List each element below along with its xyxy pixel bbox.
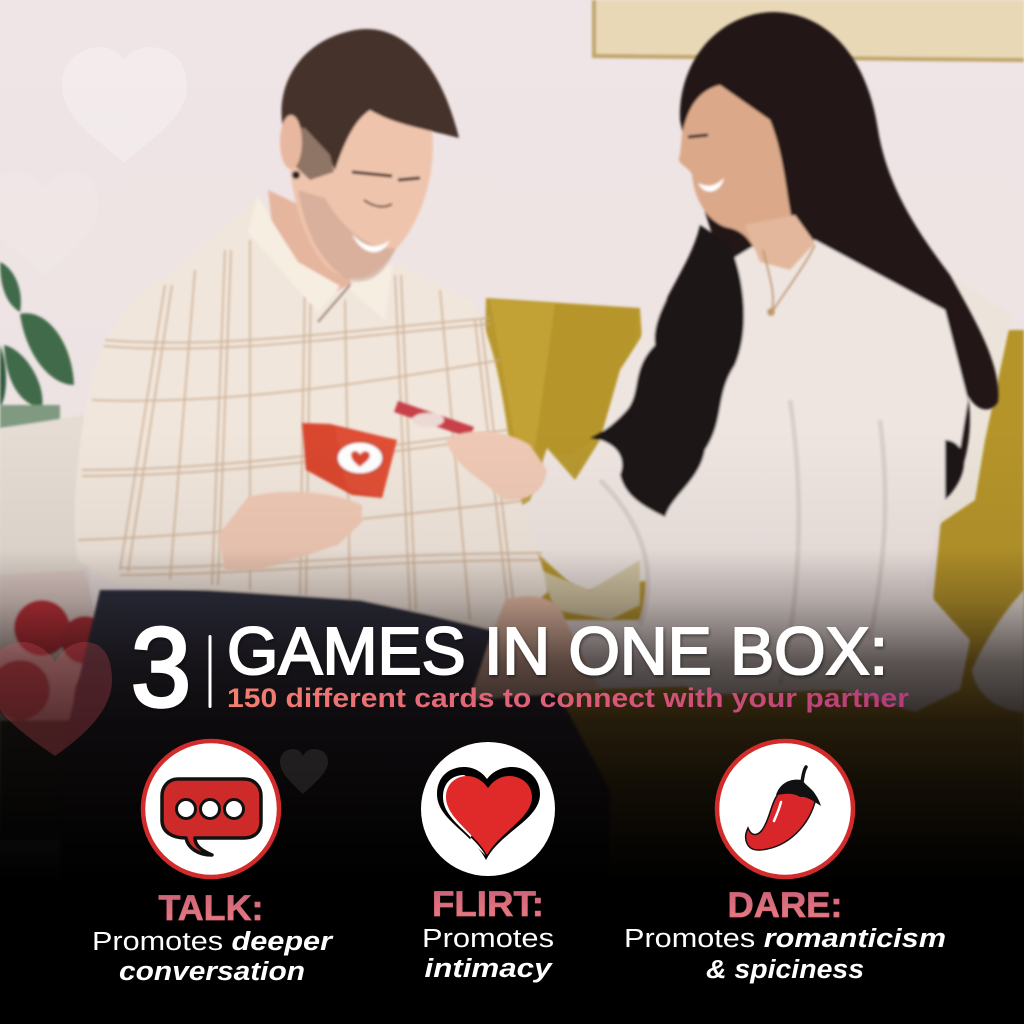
description: dare line 2: & spiciness xyxy=(706,956,864,984)
necklace xyxy=(763,245,815,312)
hair xyxy=(282,29,459,170)
label: talk: TALK: xyxy=(158,889,264,928)
description: dare: Promotes romanticism xyxy=(624,925,946,953)
smile xyxy=(698,178,724,192)
shirt xyxy=(75,198,548,632)
icon: chili pepper xyxy=(717,741,853,877)
eyebrow xyxy=(688,135,708,137)
big numeral 3: 3 xyxy=(131,605,191,730)
description: flirt line 2: intimacy xyxy=(424,955,554,983)
label: dare: DARE: xyxy=(728,886,842,925)
necklace xyxy=(318,285,350,322)
neck xyxy=(745,215,815,270)
man xyxy=(60,29,610,1024)
description: talk line 2: conversation xyxy=(119,958,305,986)
hair over forehead xyxy=(700,40,870,240)
description: flirt: Promotes xyxy=(422,925,554,953)
column: flirt xyxy=(421,742,555,983)
subtitle: 150 different cards to connect with your partner xyxy=(227,683,910,713)
blanket on left xyxy=(0,415,90,620)
hair back xyxy=(680,12,998,500)
faded side of hair xyxy=(283,128,334,180)
sofa xyxy=(480,298,1024,1024)
shirt plaid xyxy=(78,240,545,625)
faint red heart lower left xyxy=(0,642,112,756)
headline block xyxy=(131,605,910,730)
sweater shading xyxy=(600,400,885,685)
face xyxy=(679,85,802,262)
beard shadow xyxy=(298,190,396,282)
icon: heart xyxy=(421,742,555,876)
title: GAMES IN ONE BOX: xyxy=(227,614,888,689)
column: talk xyxy=(92,741,334,986)
label: flirt: FLIRT: xyxy=(432,885,544,924)
game cards and hands xyxy=(218,401,547,570)
card fan xyxy=(302,423,397,498)
hair front curls xyxy=(590,225,744,517)
column: dare xyxy=(624,741,946,984)
description: talk: Promotes deeper xyxy=(92,928,334,956)
plant xyxy=(0,262,74,429)
ear xyxy=(280,115,302,169)
framed picture xyxy=(592,0,1024,62)
icon: speech bubble xyxy=(143,741,279,877)
sweater xyxy=(500,240,970,712)
faint heart upper left xyxy=(62,47,187,162)
woman xyxy=(500,12,998,712)
faint heart left xyxy=(0,172,98,275)
resting hand xyxy=(470,596,600,700)
neck xyxy=(268,190,352,298)
dark bottom gradient overlay xyxy=(0,430,1024,1024)
faint heart centre xyxy=(280,749,328,794)
collar xyxy=(248,196,392,320)
vertical separator xyxy=(208,635,212,708)
smile xyxy=(352,234,390,252)
head xyxy=(289,85,433,279)
cushion between the couple xyxy=(540,560,640,620)
held card xyxy=(394,401,474,438)
man's hand xyxy=(218,492,362,570)
trousers xyxy=(60,590,610,1024)
fluffy cushion behind woman xyxy=(938,275,1012,525)
flowers xyxy=(0,570,126,840)
woman's hand xyxy=(446,432,547,500)
cushion right xyxy=(972,590,1024,712)
hair curl right tail xyxy=(945,440,964,500)
